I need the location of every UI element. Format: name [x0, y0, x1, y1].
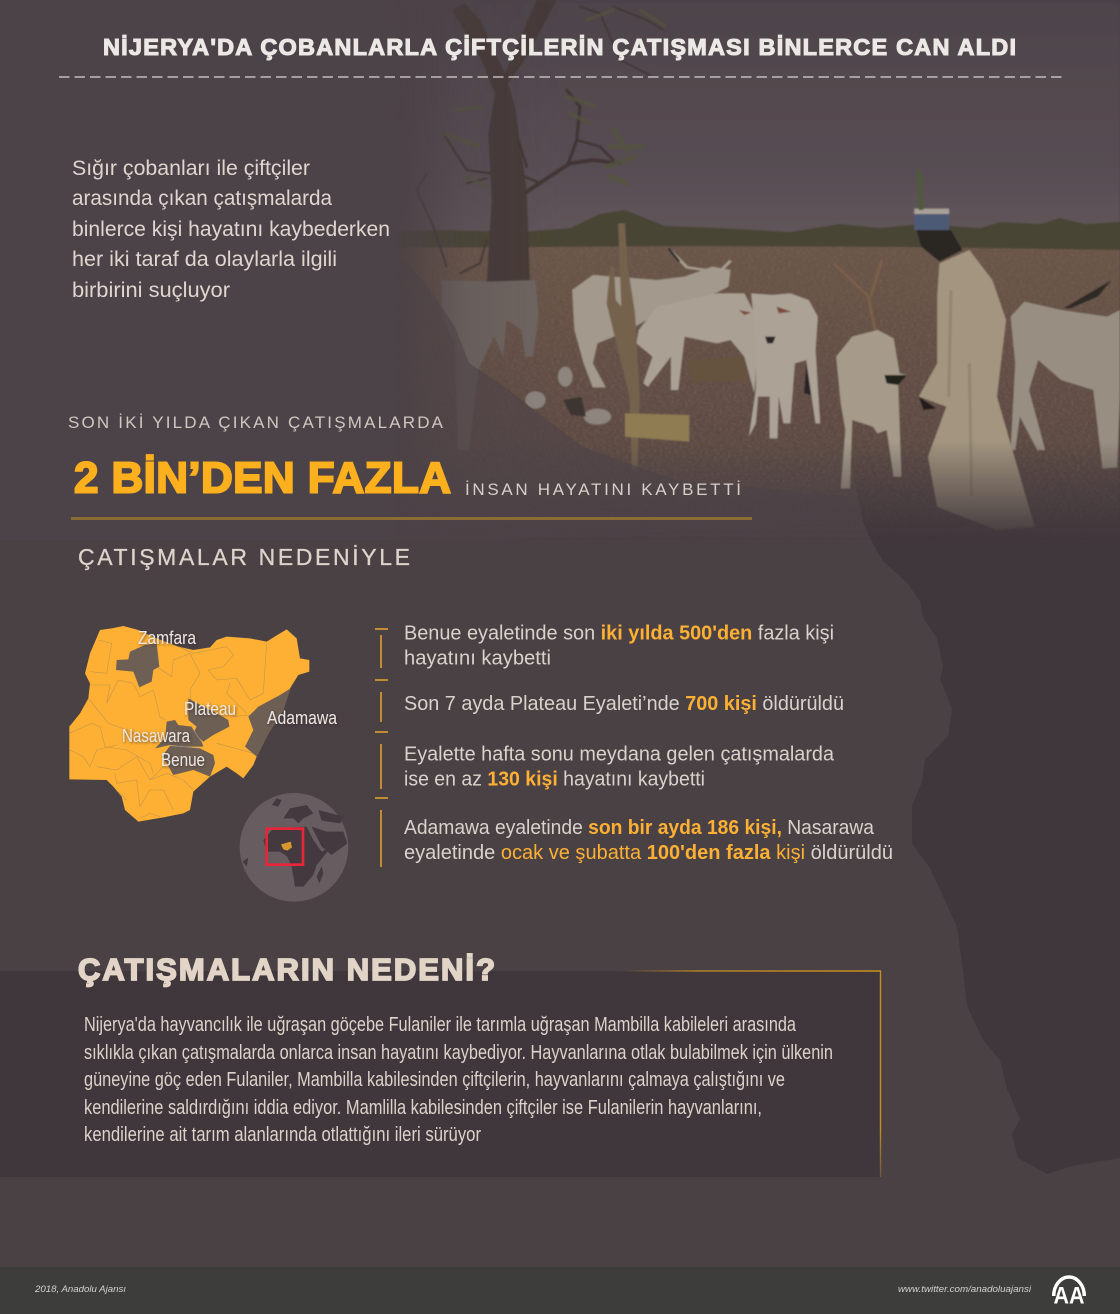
intro text: birbirini suçluyor [72, 279, 230, 302]
panel: causes [0, 952, 881, 1177]
panel body text: Nijerya'da hayvancılık ile uğraşan göçebe Fulaniler ile tarımla uğraşan Mambilla kabileleri arasında [84, 1014, 797, 1036]
fact: Adamawa and Nasarawa [404, 817, 893, 864]
panel body text: kendilerine saldırdığını iddia ediyor. Mamlilla kabilesinden çiftçiler ise Fulanilerin hayvanlarını, [84, 1097, 762, 1119]
trough [687, 357, 748, 382]
panel body text: sıklıkla çıkan çatışmalarda onlarca insan hayatını kaybediyor. Hayvanlarına otlak bulabilmek için ülkenin [84, 1042, 833, 1064]
herder head and cap [917, 230, 962, 262]
title: NİJERYA'DA ÇOBANLARLA ÇİFTÇİLERİN ÇATIŞMASI BİNLERCE CAN ALDI [103, 34, 1016, 60]
intro text: binlerce kişi hayatını kaybederken [72, 218, 390, 241]
intro text: Sığır çobanları ile çiftçiler [72, 157, 310, 180]
map labels: Benue [161, 750, 205, 770]
land overlay fading the photo [0, 0, 863, 540]
fact: weekend: Eyalette hafta sonu meydana gelen çatışmalarda [404, 744, 835, 766]
horned cow [572, 267, 731, 387]
cattle and herder, drawn in crop coordinates [441, 170, 1120, 530]
map labels: Nasawara [122, 726, 191, 746]
map labels [122, 628, 338, 770]
icon: AA logo: AA [1054, 1282, 1084, 1310]
map of Nigeria [69, 626, 338, 822]
fact: Benue [404, 622, 834, 670]
footer: www.twitter.com/anadoluajansi [898, 1284, 1032, 1295]
fact: Adamawa and Nasarawa: Adamawa eyaletinde son bir ayda 186 kişi, Nasarawa [404, 817, 875, 839]
calf [836, 330, 907, 488]
headline stat [68, 413, 752, 520]
front cow [749, 293, 820, 438]
fact: weekend: ise en az 130 kişi hayatını kaybetti [404, 768, 705, 790]
footer: 2018, Anadolu Ajansı [34, 1284, 126, 1295]
panel body text [84, 1014, 833, 1146]
fact: Benue: hayatını kaybetti [404, 648, 551, 670]
headline stat: SON İKİ YILDA ÇIKAN ÇATIŞMALARDA [68, 413, 444, 432]
fact: Plateau: Son 7 ayda Plateau Eyaleti’nde 700 kişi öldürüldü [404, 693, 844, 715]
timeline ticks [375, 629, 388, 867]
fact: Adamawa and Nasarawa: eyaletinde ocak ve şubatta 100'den fazla kişi öldürüldü [404, 842, 893, 864]
posts [607, 223, 640, 470]
panel heading: ÇATIŞMALARIN NEDENİ? [78, 952, 495, 987]
intro text: her iki taraf da olaylarla ilgili [72, 248, 337, 271]
intro text: arasında çıkan çatışmalarda [72, 187, 332, 210]
right cow [1011, 302, 1120, 468]
herder robe [919, 250, 1035, 530]
panel body text: kendilerine ait tarım alanlarında otlattığını ileri sürüyor [84, 1124, 481, 1146]
panel body text: güneyine göç eden Fulaniler, Mambilla kabilesinden çiftçilerin, hayvanlarını çalmaya çalıştığını ve [84, 1069, 785, 1091]
fact: Benue: Benue eyaletinde son iki yılda 500'den fazla kişi [404, 622, 834, 644]
tree line [380, 210, 1120, 250]
dark africa silhouette [840, 420, 1120, 1174]
map labels: Plateau [184, 699, 236, 719]
feed sack [625, 413, 689, 442]
chickens [525, 367, 611, 425]
map labels: Adamawa [267, 708, 338, 728]
middle cow [636, 293, 757, 393]
locator globe [240, 793, 348, 902]
tree [417, 0, 667, 283]
photo: herder and cattle [380, 0, 1120, 540]
headline stat: 2 BİN’DEN FAZLA [74, 454, 451, 502]
footer [0, 1267, 1120, 1314]
forked stick [834, 260, 882, 330]
map labels: Zamfara [138, 628, 197, 648]
intro text [72, 157, 390, 302]
headline stat: İNSAN HAYATINI KAYBETTİ [465, 480, 741, 499]
fact: weekend [404, 744, 835, 790]
faded cow [441, 280, 539, 450]
section heading: ÇATIŞMALAR NEDENİYLE [78, 544, 410, 570]
